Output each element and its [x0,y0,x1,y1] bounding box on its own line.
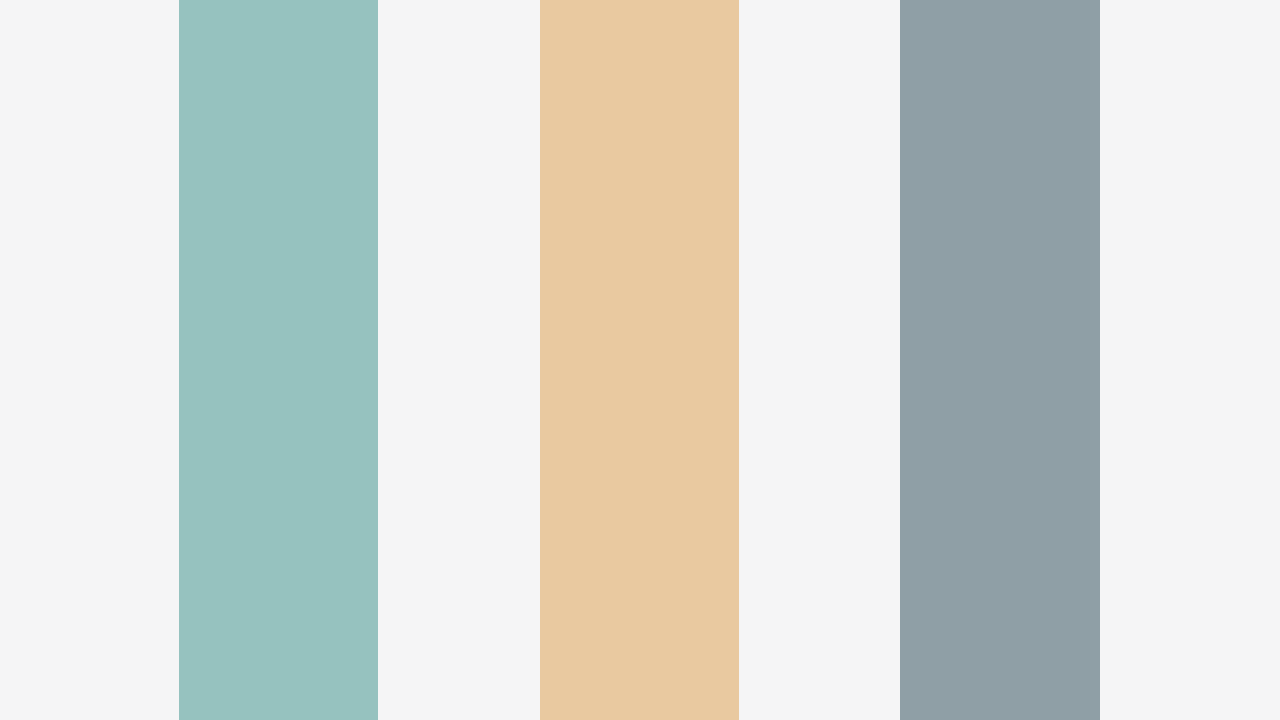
panel: peach column [540,0,739,720]
panel: teal column [179,0,378,720]
panel: slate column [900,0,1100,720]
